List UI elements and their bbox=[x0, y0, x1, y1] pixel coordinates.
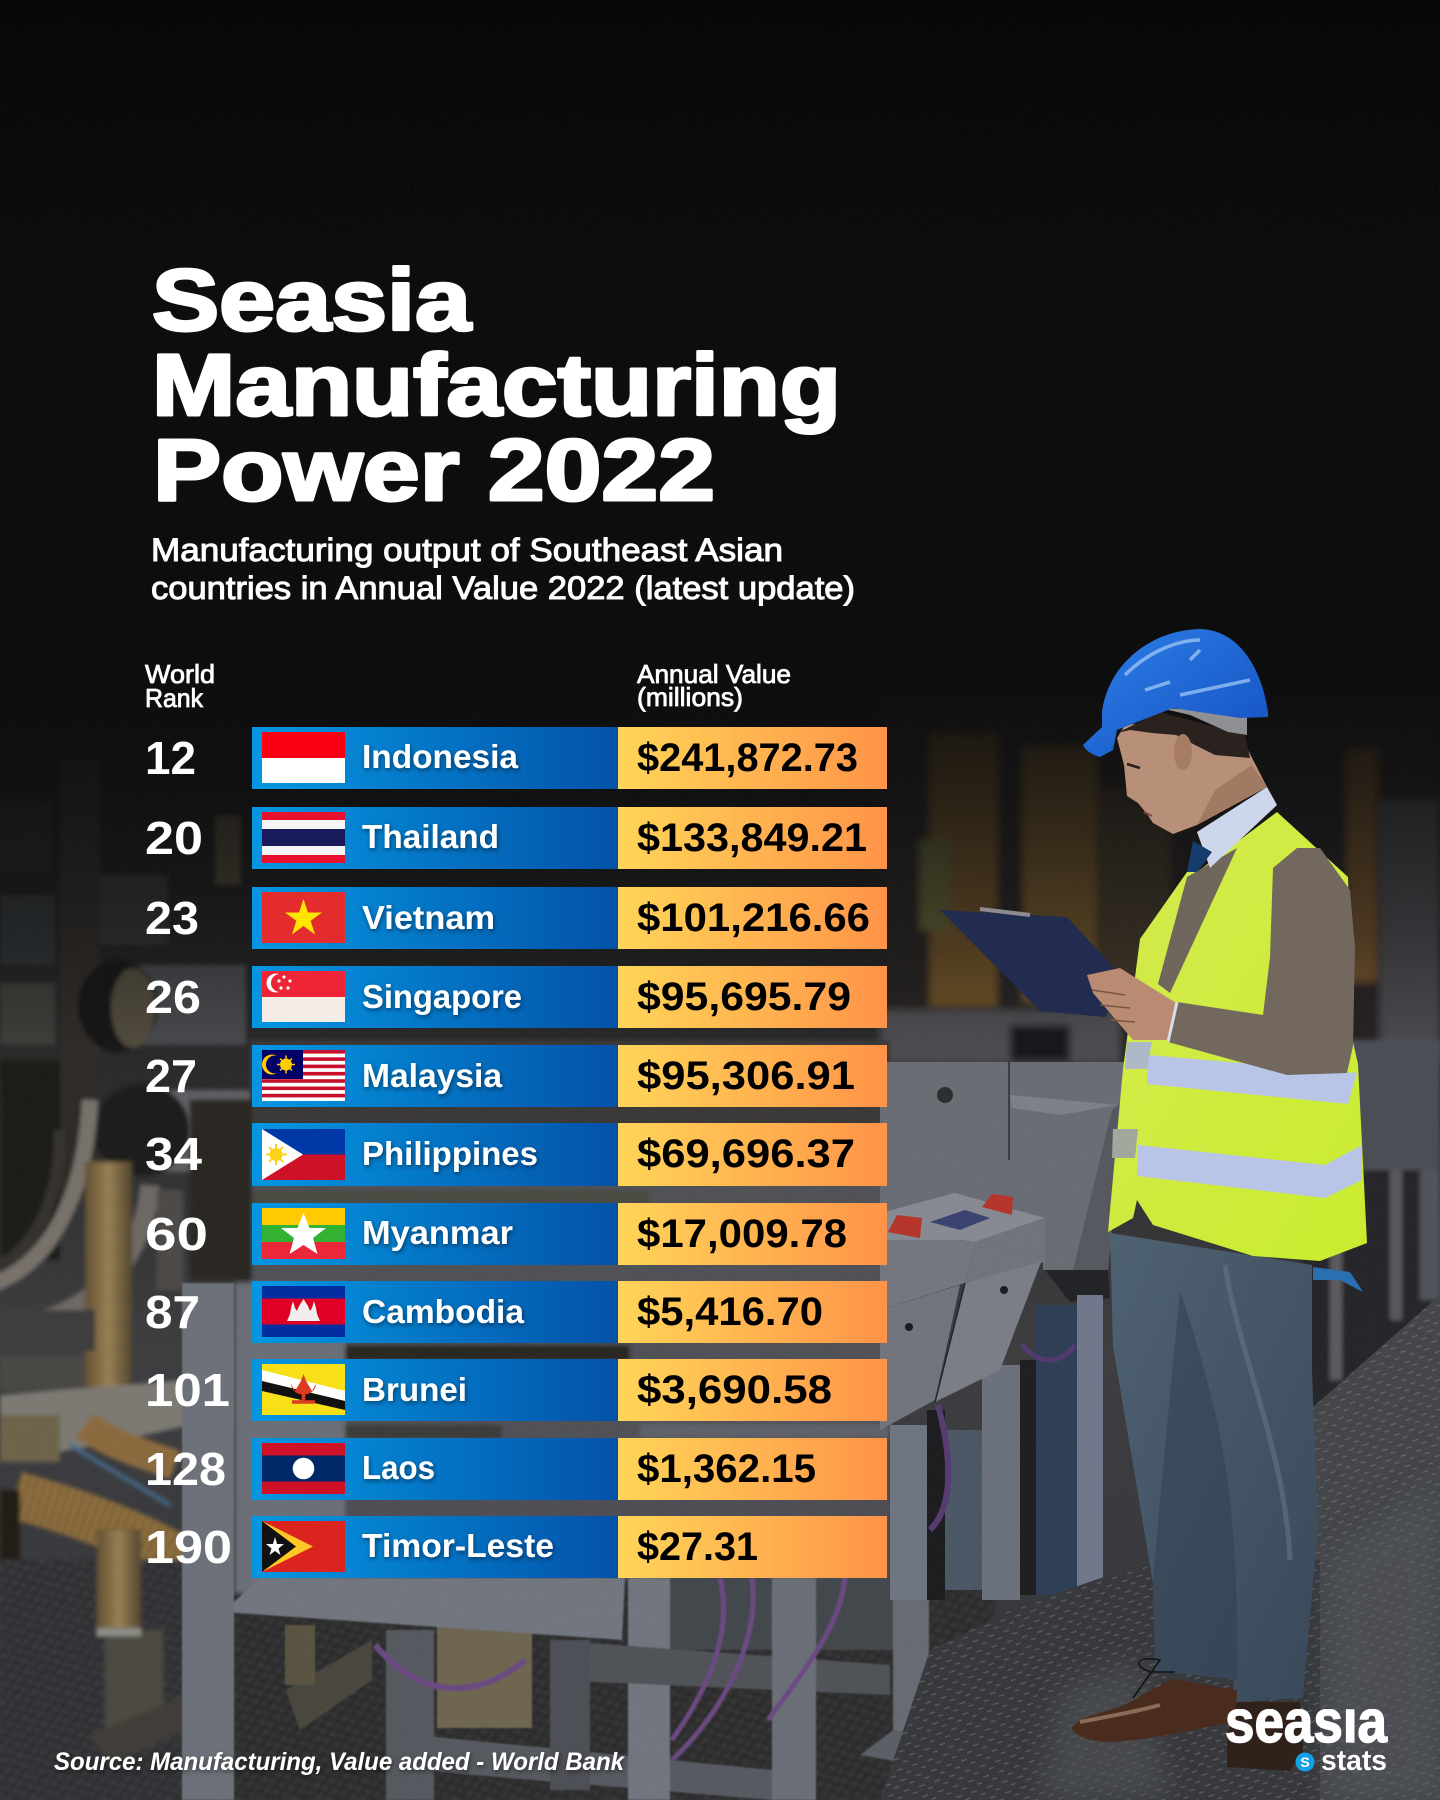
bar: country bbox=[252, 807, 618, 869]
source note: Source: Manufacturing, Value added - World Bank bbox=[54, 1748, 625, 1776]
bar: country bbox=[252, 1281, 618, 1343]
rank: 190 bbox=[145, 1521, 232, 1573]
row: Brunei bbox=[145, 1359, 887, 1421]
icon: flag of the Philippines bbox=[262, 1129, 345, 1180]
bar: value bbox=[618, 1123, 887, 1186]
bar: country bbox=[252, 1359, 618, 1421]
bar: country bbox=[252, 727, 618, 789]
worker: face and neck bbox=[1117, 720, 1267, 834]
rank: 128 bbox=[145, 1443, 226, 1495]
worker: sweater neckline bbox=[1158, 848, 1237, 993]
worker: blue hard hat bbox=[1083, 629, 1268, 757]
value: $69,696.37 bbox=[637, 1132, 855, 1176]
worker: hand bbox=[1087, 968, 1178, 1040]
value: $95,306.91 bbox=[637, 1054, 855, 1098]
icon: stats coin bbox=[1296, 1752, 1314, 1772]
row: Philippines bbox=[145, 1123, 887, 1186]
worker: pocket item bbox=[1313, 1267, 1363, 1292]
bar: value bbox=[618, 1281, 887, 1343]
rank: 34 bbox=[145, 1128, 202, 1180]
panel: industrial photo background bbox=[0, 700, 1440, 1800]
row: Cambodia bbox=[145, 1281, 887, 1343]
logo stats text: stats bbox=[1321, 1745, 1387, 1777]
row: Indonesia bbox=[145, 727, 887, 789]
rank: 26 bbox=[145, 971, 201, 1023]
worker: finger lines bbox=[1092, 990, 1135, 1022]
background: light bands on floor bbox=[1040, 1480, 1440, 1800]
worker: neck shadow bbox=[1197, 765, 1267, 825]
column header: annual value: Annual Value bbox=[637, 659, 791, 689]
value: $133,849.21 bbox=[637, 816, 867, 860]
rank: 87 bbox=[145, 1286, 200, 1338]
worker: eye bbox=[1127, 764, 1140, 768]
bar: value bbox=[618, 1516, 887, 1578]
value: $101,216.66 bbox=[637, 896, 870, 940]
country name: Philippines bbox=[362, 1135, 538, 1172]
rank: 101 bbox=[145, 1364, 230, 1416]
country name: Timor-Leste bbox=[362, 1527, 554, 1564]
background: back wall with orange panels bbox=[880, 700, 1440, 1150]
worker: sweater sleeve bbox=[1168, 848, 1355, 1075]
illustration: worker in hard hat with clipboard bbox=[940, 629, 1367, 1771]
worker: reflective stripe upper left bbox=[1125, 1042, 1152, 1069]
icon: flag of Laos bbox=[262, 1443, 345, 1494]
value: $27.31 bbox=[637, 1525, 758, 1569]
background: control consoles bbox=[880, 1062, 1125, 1600]
icon: red emergency button (right) bbox=[982, 1194, 1013, 1215]
row: Singapore bbox=[145, 966, 887, 1028]
country name: Indonesia bbox=[362, 738, 519, 775]
column header: annual value: (millions) bbox=[637, 682, 743, 712]
country name: Malaysia bbox=[362, 1057, 503, 1094]
icon: flag of Myanmar bbox=[262, 1208, 345, 1259]
worker: front leg crease bbox=[1225, 1265, 1290, 1560]
worker: clipboard bbox=[940, 910, 1127, 1017]
bar: country bbox=[252, 1438, 618, 1500]
rank: 23 bbox=[145, 892, 199, 944]
icon: flag of Thailand bbox=[262, 812, 345, 863]
value: $5,416.70 bbox=[637, 1290, 823, 1334]
worker: shoe laces bbox=[1133, 1659, 1175, 1698]
background: grey machine frame bbox=[182, 1283, 932, 1800]
country name: Thailand bbox=[362, 818, 499, 855]
rank: 60 bbox=[145, 1208, 208, 1260]
value: $3,690.58 bbox=[637, 1368, 832, 1412]
logo wordmark: seasia bbox=[1225, 1688, 1388, 1755]
rank: 12 bbox=[145, 732, 196, 784]
value: $241,872.73 bbox=[637, 736, 858, 780]
bar: country bbox=[252, 887, 618, 949]
background: black fade toward top bbox=[0, 0, 1440, 1040]
worker: tie bbox=[1187, 841, 1212, 872]
country name: Vietnam bbox=[362, 899, 495, 936]
background: right machinery columns bbox=[1300, 1040, 1440, 1410]
worker: safety vest bbox=[1108, 812, 1367, 1261]
worker: right shoe bbox=[1227, 1702, 1303, 1771]
worker: left shoe bbox=[1072, 1679, 1237, 1742]
bar: country bbox=[252, 1516, 618, 1578]
worker: hair bbox=[1117, 712, 1250, 758]
worker: shirt cuff bbox=[1168, 1002, 1177, 1042]
row: Laos bbox=[145, 1438, 887, 1500]
row: Thailand bbox=[145, 807, 887, 869]
title: Manufacturing bbox=[152, 337, 841, 434]
country name: Singapore bbox=[362, 978, 522, 1015]
worker: mouth bbox=[1144, 812, 1152, 816]
row: Timor-Leste bbox=[145, 1516, 887, 1578]
bar: value bbox=[618, 807, 887, 869]
worker: helmet inner band bbox=[1160, 708, 1247, 735]
subtitle: Manufacturing output of Southeast Asian bbox=[151, 532, 783, 568]
title bbox=[152, 252, 841, 519]
worker: collar bbox=[1197, 787, 1277, 868]
worker: reflective stripe lower bbox=[1137, 1145, 1362, 1198]
icon: flag of Brunei bbox=[262, 1364, 345, 1415]
background: pipes at left bbox=[0, 760, 252, 1800]
rank: 27 bbox=[145, 1050, 197, 1102]
icon: flag of Timor-Leste bbox=[262, 1521, 345, 1572]
row: Myanmar bbox=[145, 1203, 887, 1265]
country name: Laos bbox=[362, 1449, 435, 1486]
subtitle: countries in Annual Value 2022 (latest update) bbox=[151, 570, 855, 606]
bar: value bbox=[618, 727, 887, 789]
worker: ear bbox=[1174, 734, 1192, 770]
row: Malaysia bbox=[145, 1045, 887, 1107]
worker: hard hat highlights bbox=[1125, 640, 1250, 695]
country name: Cambodia bbox=[362, 1293, 525, 1330]
worker: shoe sole highlight bbox=[1080, 1705, 1160, 1722]
icon: flag of Cambodia bbox=[262, 1286, 345, 1337]
worker: trousers bbox=[1110, 1233, 1318, 1702]
column header: world rank: World bbox=[145, 659, 215, 689]
value: $1,362.15 bbox=[637, 1447, 816, 1491]
title: Seasia bbox=[152, 252, 472, 349]
bar: value bbox=[618, 887, 887, 949]
icon: flag of Malaysia bbox=[262, 1050, 345, 1101]
icon: flag of Singapore bbox=[262, 971, 345, 1022]
bar: value bbox=[618, 1359, 887, 1421]
rank: 20 bbox=[145, 812, 203, 864]
worker: clipboard clip bbox=[980, 909, 1030, 915]
icon: stats coin: S bbox=[1300, 1754, 1310, 1770]
background: riveted floor bbox=[880, 1295, 1440, 1800]
column header: world rank: Rank bbox=[145, 683, 204, 713]
column header: world rank bbox=[145, 659, 215, 713]
subtitle bbox=[151, 532, 855, 606]
icon: flag of Vietnam bbox=[262, 892, 345, 943]
country name: Myanmar bbox=[362, 1214, 513, 1251]
logo: seasia stats bbox=[1226, 1709, 1388, 1772]
bar: value bbox=[618, 1438, 887, 1500]
bar: country bbox=[252, 1045, 618, 1107]
title: Power 2022 bbox=[153, 422, 715, 519]
worker: reflective stripe upper bbox=[1147, 1055, 1357, 1104]
background: machinery behind the table bbox=[190, 1040, 994, 1800]
bar: country bbox=[252, 966, 618, 1028]
bar: value bbox=[618, 1045, 887, 1107]
row: Vietnam bbox=[145, 887, 887, 949]
country name: Brunei bbox=[362, 1371, 467, 1408]
value: $95,695.79 bbox=[637, 975, 851, 1019]
bar: value bbox=[618, 1203, 887, 1265]
worker: rear leg shading bbox=[1153, 1290, 1237, 1680]
bar: value bbox=[618, 966, 887, 1028]
value: $17,009.78 bbox=[637, 1212, 847, 1256]
icon: red emergency button (left) bbox=[888, 1215, 922, 1238]
bar: country bbox=[252, 1203, 618, 1265]
icon: flag of Indonesia bbox=[262, 732, 345, 783]
bar: country bbox=[252, 1123, 618, 1186]
column header: annual value bbox=[637, 659, 791, 712]
worker: reflective stripe lower left bbox=[1112, 1129, 1138, 1158]
